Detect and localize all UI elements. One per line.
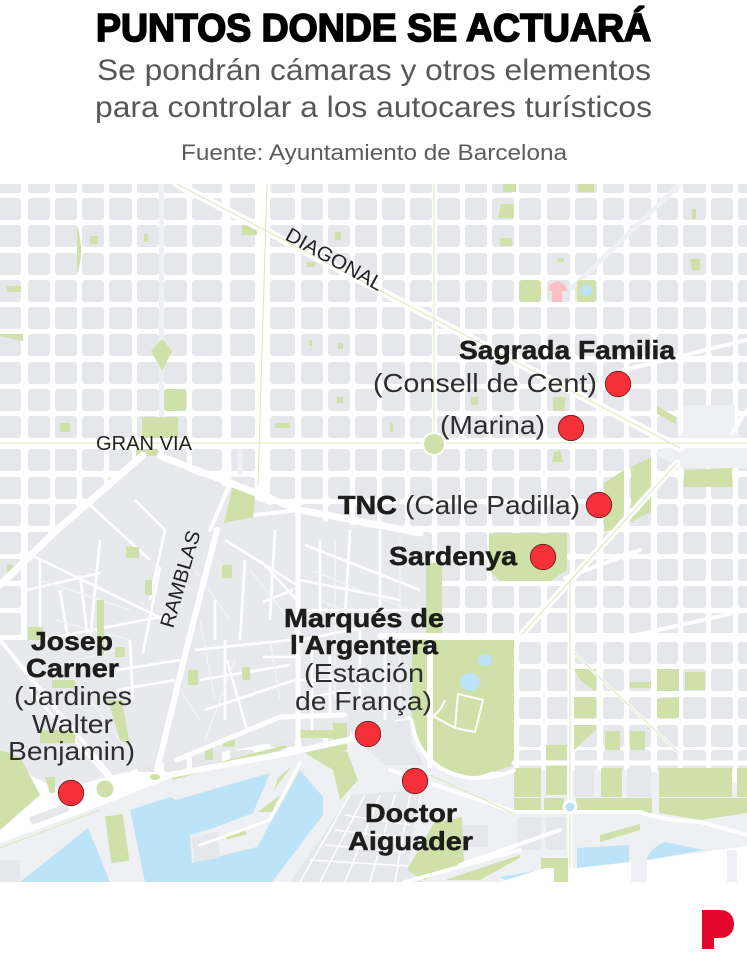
marina pier [190,827,216,837]
subtitle: para controlar a los autocares turísticos [95,91,652,124]
red location markers [58,371,631,806]
street grid [0,171,747,772]
marker label: Marqués de l'Argentera: de França) [295,686,432,716]
marker label: Marqués de l'Argentera: (Estación [304,658,424,688]
water [20,770,704,882]
main white avenues [0,184,747,882]
marker label: Doctor Aiguader [348,798,473,856]
marker label: Sagrada Familia [373,335,676,440]
marker label: Doctor Aiguader: Aiguader [348,826,473,856]
marker label: Sagrada Familia: (Consell de Cent) [373,368,597,398]
road label: Ramblas: RAMBLAS [157,528,205,630]
roundabouts [95,433,576,813]
marker label: Doctor Aiguader: Doctor [365,798,457,828]
glories area [655,405,747,468]
marker label: Sagrada Familia: (Marina) [440,410,545,440]
marker label: Marqués de l'Argentera: l'Argentera [290,630,439,660]
marker label: Marqués de l'Argentera: Marqués de [284,603,444,633]
parks and green patches [0,184,747,882]
eastern blocks south [0,768,651,882]
subtitle: Se pondrán cámaras y otros elementos [97,54,651,87]
road label: Diagonal: DIAGONAL [282,224,387,296]
marker label: Josep Carner: Josep [31,626,113,656]
marker label: Josep Carner: Carner [26,653,119,683]
barceloneta [290,790,424,882]
marker label: Marqués de l'Argentera [284,603,444,716]
green: montjuic [0,750,40,830]
old town streets [27,500,420,780]
title: PUNTOS DONDE SE ACTUARÁ [96,6,651,50]
marker label: Josep Carner: Walter [32,709,113,739]
marker label: Josep Carner: Benjamin) [8,736,135,766]
road label: Gran Via: GRAN VIA [96,433,193,455]
marker label: TNC: (Calle Padilla) [405,490,580,520]
faint avenue fills in the grid [162,184,680,475]
marker label: TNC [338,490,580,520]
subtitle [95,54,652,124]
source: Fuente: Ayuntamiento de Barcelona [181,140,568,165]
marker label: Josep Carner: (Jardines [14,681,132,711]
white sea beyond the coast [500,846,747,882]
ciutadella lakes [460,654,492,691]
marker label: TNC: TNC [338,490,397,520]
marker label: Sardenya: Sardenya [389,541,518,571]
station block [345,720,425,765]
map [0,171,747,882]
logo [702,910,734,949]
sagrada familia building [549,281,568,302]
light port land [0,725,747,882]
old town [0,452,426,790]
marker label: Josep Carner [8,626,135,766]
green median lines [0,184,747,880]
ciutadella inner paths [433,694,483,732]
marker label: Sagrada Familia: Sagrada Familia [459,335,676,365]
